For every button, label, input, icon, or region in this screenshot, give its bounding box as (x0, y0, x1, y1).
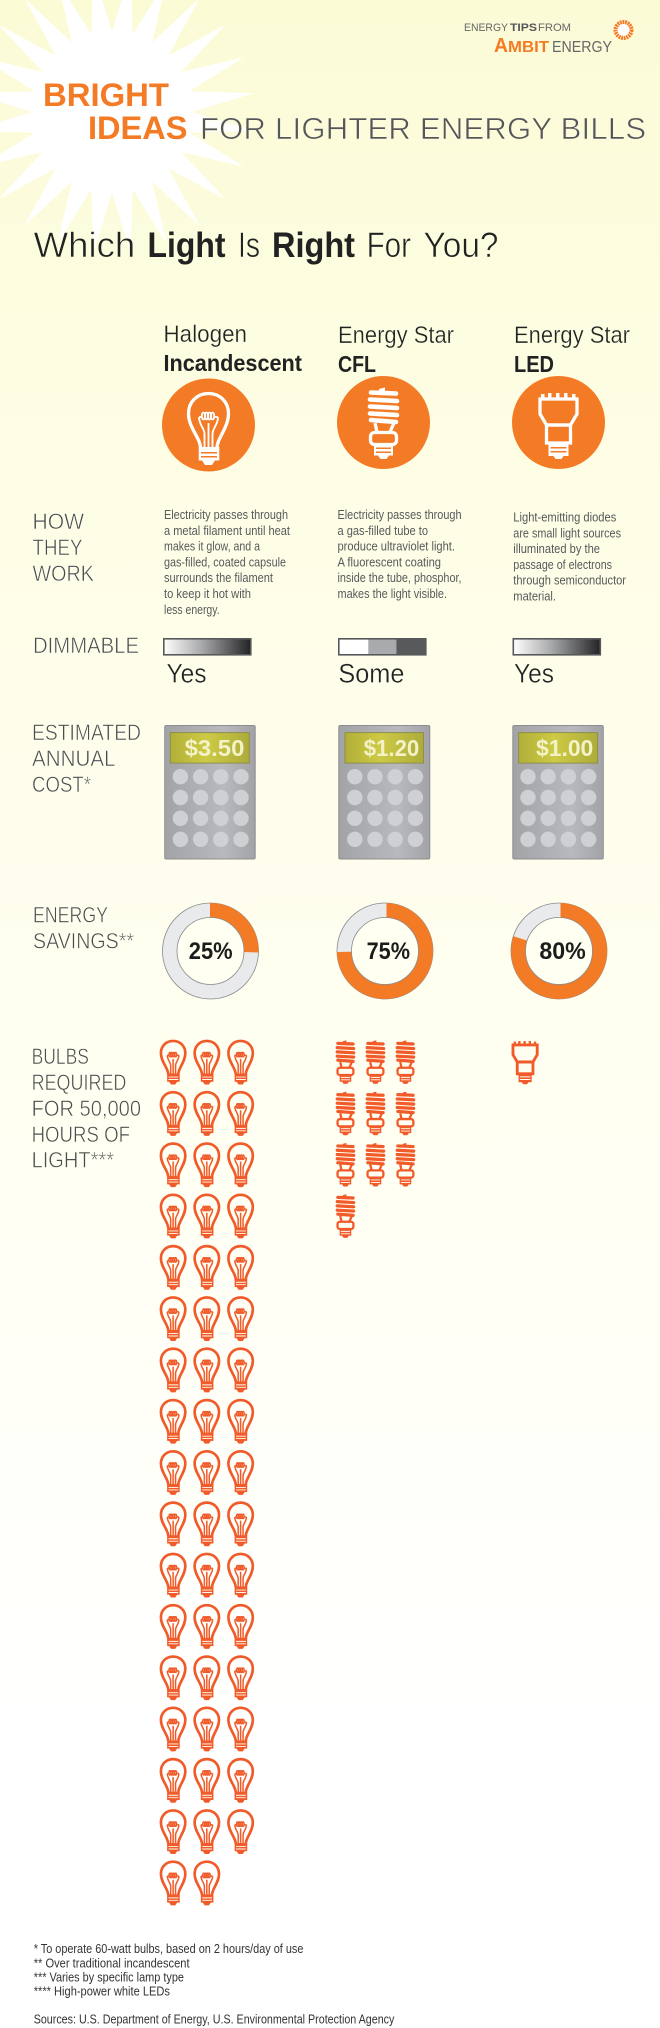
text: how CFL works: produce ultraviolet light. (338, 540, 455, 554)
text: how LED works: illuminated by the (513, 542, 600, 556)
label: bulbs required: REQUIRED (32, 1070, 126, 1095)
column heading: Halogen Incandescent: Halogen (164, 321, 247, 348)
dimmer bar: CFL (338, 639, 426, 689)
label: how they work: HOW (32, 509, 85, 534)
text: how incandescent works (164, 508, 290, 617)
label: how they work: WORK (32, 561, 94, 586)
label: estimated annual cost (32, 720, 141, 797)
column heading: Energy Star LED: Energy Star (514, 322, 630, 349)
heading: Which Light Is Right For You?: Light (148, 225, 226, 265)
column heading: Energy Star LED (514, 322, 630, 377)
text: how LED works: Light-emitting diodes (513, 510, 616, 524)
label: how they work (32, 509, 94, 586)
footnotes: *** Varies by specific lamp type (34, 1969, 184, 1984)
heading: Which Light Is Right For You?: You? (424, 225, 498, 265)
logo: Ambit Energy (464, 22, 632, 57)
title: IDEAS (88, 110, 188, 146)
text: how LED works (513, 510, 626, 604)
footnotes: ** Over traditional incandescent (34, 1955, 190, 1970)
title: FOR LIGHTER ENERGY BILLS (200, 111, 646, 146)
column heading: Halogen Incandescent: Incandescent (164, 350, 302, 376)
heading: Which Light Is Right For You?: Right (272, 225, 355, 265)
footnotes: **** High-power white LEDs (34, 1983, 170, 1998)
calculator: $1.00 (513, 726, 603, 859)
logo: Ambit Energy: FROM (538, 22, 571, 34)
title (43, 77, 646, 146)
text: how LED works: are small light sources (513, 526, 621, 540)
text: how incandescent works: gas-filled, coated capsule (164, 555, 286, 569)
column heading: Halogen Incandescent (164, 321, 302, 376)
text: how incandescent works: a metal filament until heat (164, 524, 290, 538)
text: how LED works: material. (513, 590, 556, 604)
text: how LED works: through semiconductor (513, 574, 626, 588)
footnotes (34, 1941, 303, 1998)
pictogram: 10 CFL bulbs (337, 1040, 414, 1238)
calculator: $1.20 (339, 726, 430, 859)
icon: incandescent bulb (162, 378, 255, 472)
dimmer bar: LED: Yes (514, 659, 554, 689)
icon: CFL bulb (337, 376, 430, 469)
text: how CFL works: Electricity passes through (338, 508, 462, 522)
donut chart: 80%: 80% (539, 938, 586, 965)
calculator: $3.50 (165, 726, 255, 859)
label: bulbs required (32, 1044, 141, 1173)
label: how they work: THEY (32, 535, 82, 560)
text: how LED works: passage of electrons (513, 558, 612, 572)
donut chart: 25%: 25% (189, 938, 233, 965)
text: how incandescent works: surrounds the filament (164, 571, 273, 585)
pictogram: 1 LED bulb (513, 1041, 537, 1084)
label: estimated annual cost: COST* (32, 772, 91, 797)
calculator: $3.50: $3.50 (185, 735, 244, 761)
text: how CFL works: inside the tube, phosphor, (338, 571, 462, 585)
heading: Which Light Is Right For You?: For (367, 225, 411, 265)
donut chart: 80% (511, 903, 607, 999)
logo: Ambit Energy: ENERGY (552, 39, 612, 56)
label: bulbs required: BULBS (32, 1044, 89, 1069)
logo: Ambit Energy: A (494, 35, 508, 57)
text: how CFL works: makes the light visible. (338, 587, 447, 601)
text: how incandescent works: Electricity passes through (164, 508, 288, 522)
donut chart: 75%: 75% (367, 938, 410, 965)
title: BRIGHT (43, 77, 169, 113)
label: energy savings: SAVINGS** (33, 928, 134, 953)
calculator: $1.00: $1.00 (536, 735, 593, 761)
dimmer bar: LED (513, 639, 600, 689)
text: how incandescent works: makes it glow, and a (164, 540, 260, 554)
dimmer bar: incandescent: Yes (166, 659, 206, 689)
label: bulbs required: LIGHT*** (32, 1148, 114, 1173)
label: estimated annual cost: ESTIMATED (32, 720, 141, 745)
icon: LED bulb (512, 376, 605, 469)
column heading: Energy Star CFL: CFL (338, 351, 376, 377)
label: energy savings: ENERGY (33, 903, 108, 928)
donut chart: 25% (162, 903, 259, 999)
label: energy savings (33, 903, 134, 953)
label: bulbs required: HOURS OF (32, 1122, 130, 1147)
label: dimmable: DIMMABLE (33, 633, 139, 658)
donut chart: 75% (337, 903, 433, 999)
text: how CFL works: A fluorescent coating (338, 555, 441, 569)
dimmer bar: CFL: Some (338, 659, 404, 689)
logo: Ambit Energy: TIPS (510, 22, 537, 34)
sunburst (0, 0, 254, 254)
dimmer bar: incandescent (164, 639, 251, 689)
logo: Ambit Energy: MBIT (508, 39, 549, 56)
calculator: $1.20: $1.20 (364, 735, 419, 761)
column heading: Energy Star CFL: Energy Star (338, 322, 454, 349)
heading: Which Light Is Right For You?: Is (238, 225, 260, 265)
column heading: Energy Star CFL (338, 322, 454, 377)
text: how incandescent works: less energy. (164, 603, 220, 617)
label: bulbs required: FOR 50,000 (32, 1096, 141, 1121)
pictogram: 50 incandescent bulbs (161, 1041, 253, 1905)
text: how incandescent works: to keep it hot with (164, 587, 251, 601)
label: estimated annual cost: ANNUAL (32, 746, 116, 771)
sources: Sources: U.S. Department of Energy, U.S. Environmental Protection Agency (34, 2011, 395, 2026)
text: how CFL works: a gas-filled tube to (338, 524, 428, 538)
heading: Which Light Is Right For You?: Which (34, 225, 135, 265)
footnotes: * To operate 60-watt bulbs, based on 2 hours/day of use (34, 1941, 303, 1956)
logo: Ambit Energy: ENERGY (464, 22, 509, 34)
heading: Which Light Is Right For You? (34, 225, 498, 265)
column heading: Energy Star LED: LED (514, 351, 554, 377)
text: how CFL works (338, 508, 462, 601)
